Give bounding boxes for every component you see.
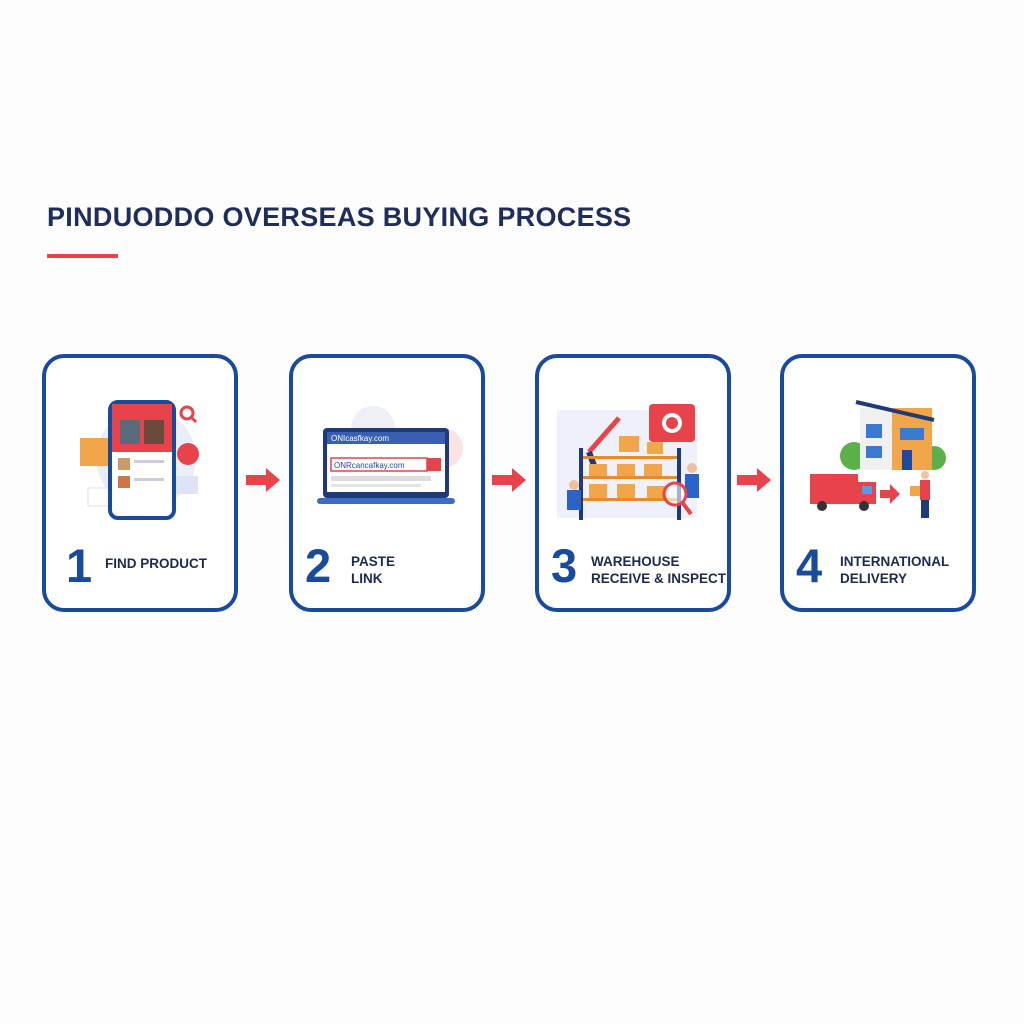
panel: find product (42, 354, 238, 612)
icon: phone shopping (80, 400, 199, 520)
icon: delivery truck and house (810, 400, 946, 518)
panel: paste link (289, 354, 485, 612)
step number 2: 2 (305, 539, 331, 592)
label: paste link (351, 554, 395, 586)
arrow 1 (246, 468, 280, 492)
step number 4: 4 (796, 539, 822, 592)
label: international delivery: DELIVERY (840, 571, 907, 586)
step number 3: 3 (551, 539, 577, 592)
label: warehouse (591, 554, 726, 586)
label: international delivery (840, 554, 949, 586)
arrow 3 (737, 468, 771, 492)
panel: warehouse (535, 354, 731, 612)
title: PINDUODDO OVERSEAS BUYING PROCESS (47, 202, 632, 232)
label: international delivery: INTERNATIONAL (840, 554, 949, 569)
icon: laptop browser: ONIcasfkay.com (331, 434, 389, 443)
label: warehouse: RECEIVE & INSPECT (591, 571, 726, 586)
step number 1: 1 (66, 539, 92, 592)
label: paste link: LINK (351, 571, 382, 586)
arrow 2 (492, 468, 526, 492)
label: warehouse: WAREHOUSE (591, 554, 680, 569)
icon: laptop browser (317, 406, 463, 504)
icon: warehouse inspection (557, 404, 699, 520)
icon: laptop browser: ONRcancafkay.com (334, 461, 405, 470)
title underline (47, 254, 118, 258)
label: find product: FIND PRODUCT (105, 556, 207, 571)
panel: international delivery (780, 354, 976, 612)
label: paste link: PASTE (351, 554, 395, 569)
